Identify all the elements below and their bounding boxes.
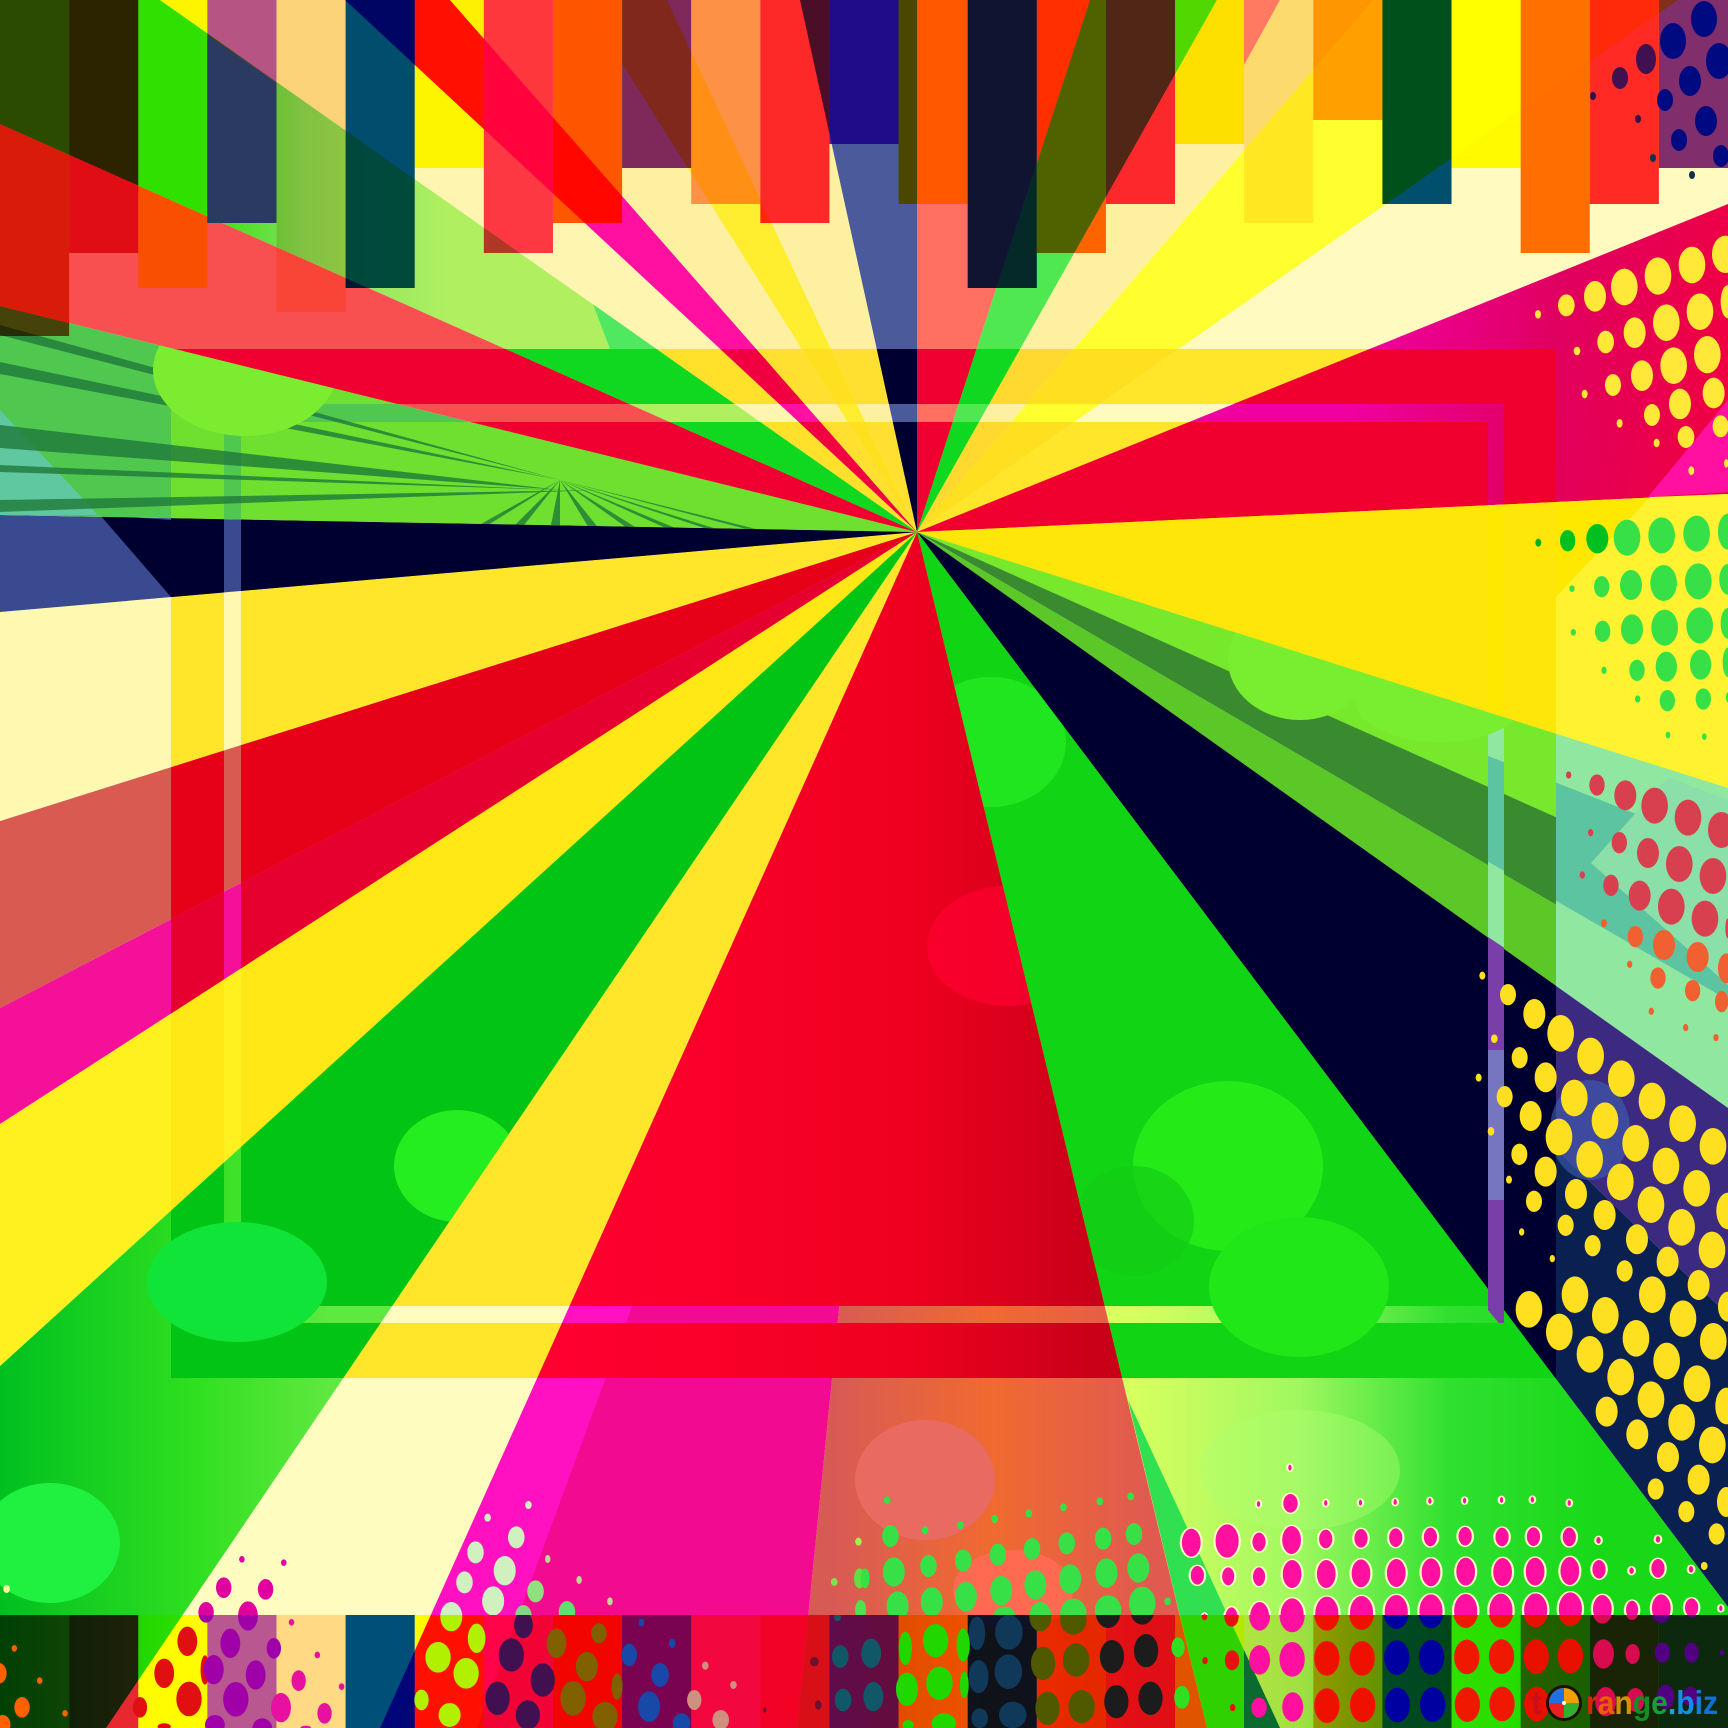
green dots on salmon, bottom centre: [860, 1492, 1171, 1615]
inner saturated rays inside double frame: [171, 349, 1556, 1378]
dark dots on top right bars: [1590, 1, 1728, 179]
halftone dots above lower band: [3, 1464, 1724, 1632]
watermark logo text: o: [1555, 1684, 1575, 1721]
halftone dots: green on yellow, right: [1535, 514, 1728, 740]
icon: colour wheel in logo: [1546, 1685, 1582, 1721]
halftone dots: red and orange on teal, right: [1566, 771, 1728, 1041]
watermark logo text: range.biz: [1586, 1684, 1718, 1721]
halftone dots: yellow on crimson, top right: [1535, 236, 1728, 475]
watermark logo text: t: [1531, 1684, 1542, 1721]
bottom colour bars: [0, 1615, 1728, 1728]
lower bar dots, right half: [861, 1615, 1724, 1728]
soft bokeh highlights: [0, 304, 1630, 1630]
halftone dots inside lower bars: [0, 1615, 1724, 1728]
top hanging colour bars: [0, 0, 1728, 336]
pale dots on magenta, lower centre left: [3, 1501, 866, 1615]
halftone dots: yellow on navy, lower right: [1476, 972, 1728, 1570]
magenta dots on cream, lower left: [198, 1556, 287, 1615]
lower bar dots, left half: [0, 1615, 852, 1728]
green ray dark streaks: [0, 325, 760, 530]
magenta dots on lime, bottom right: [1181, 1464, 1724, 1632]
